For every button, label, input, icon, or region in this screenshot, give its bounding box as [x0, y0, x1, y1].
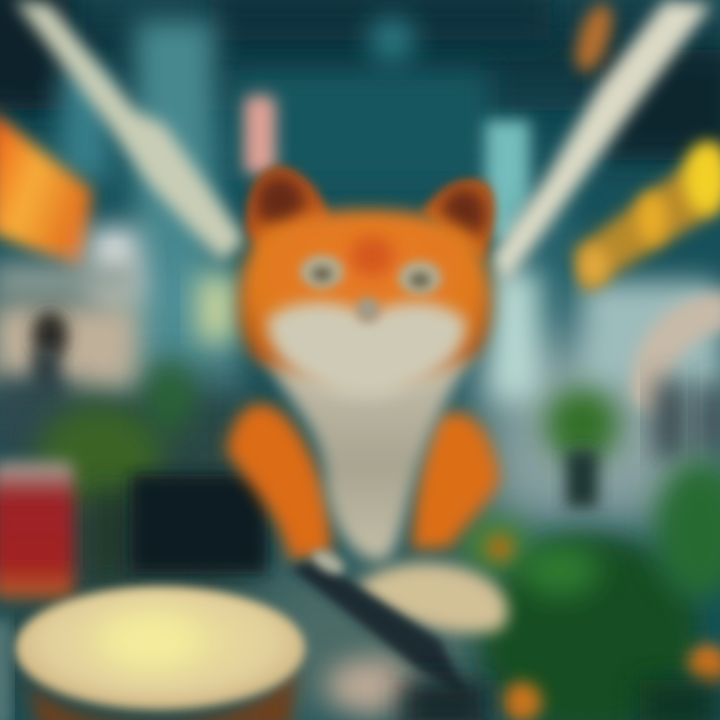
small plate	[326, 658, 418, 714]
sign: right yellow	[574, 140, 720, 292]
archway: right	[630, 290, 720, 460]
dark utensil	[290, 560, 470, 700]
cat ears	[246, 167, 495, 262]
pink marker behind the cat	[244, 95, 276, 175]
bowl: lower left	[15, 586, 305, 720]
red can	[0, 462, 74, 598]
dark box	[130, 474, 268, 574]
cat	[226, 167, 500, 561]
cat forehead mark	[350, 236, 394, 276]
cat chest	[262, 350, 475, 561]
pale yellow panel	[198, 276, 234, 342]
cat eyes	[300, 255, 442, 295]
orange accent: top right	[569, 0, 619, 77]
plant: right planter	[546, 389, 618, 508]
dark base	[400, 680, 490, 720]
storefront: left	[0, 228, 140, 448]
light streak: top left	[14, 0, 246, 262]
left table edge	[0, 620, 8, 720]
cat head	[239, 210, 491, 378]
utensil highlight	[308, 545, 348, 579]
platform under the cat	[355, 563, 508, 633]
cat legs	[226, 404, 500, 560]
sign: left orange	[0, 110, 92, 272]
foliage: lower right	[461, 460, 720, 720]
light streak: top right	[490, 0, 712, 285]
plant: left	[38, 362, 194, 580]
cat nose	[356, 297, 380, 323]
cat muzzle	[268, 302, 466, 398]
